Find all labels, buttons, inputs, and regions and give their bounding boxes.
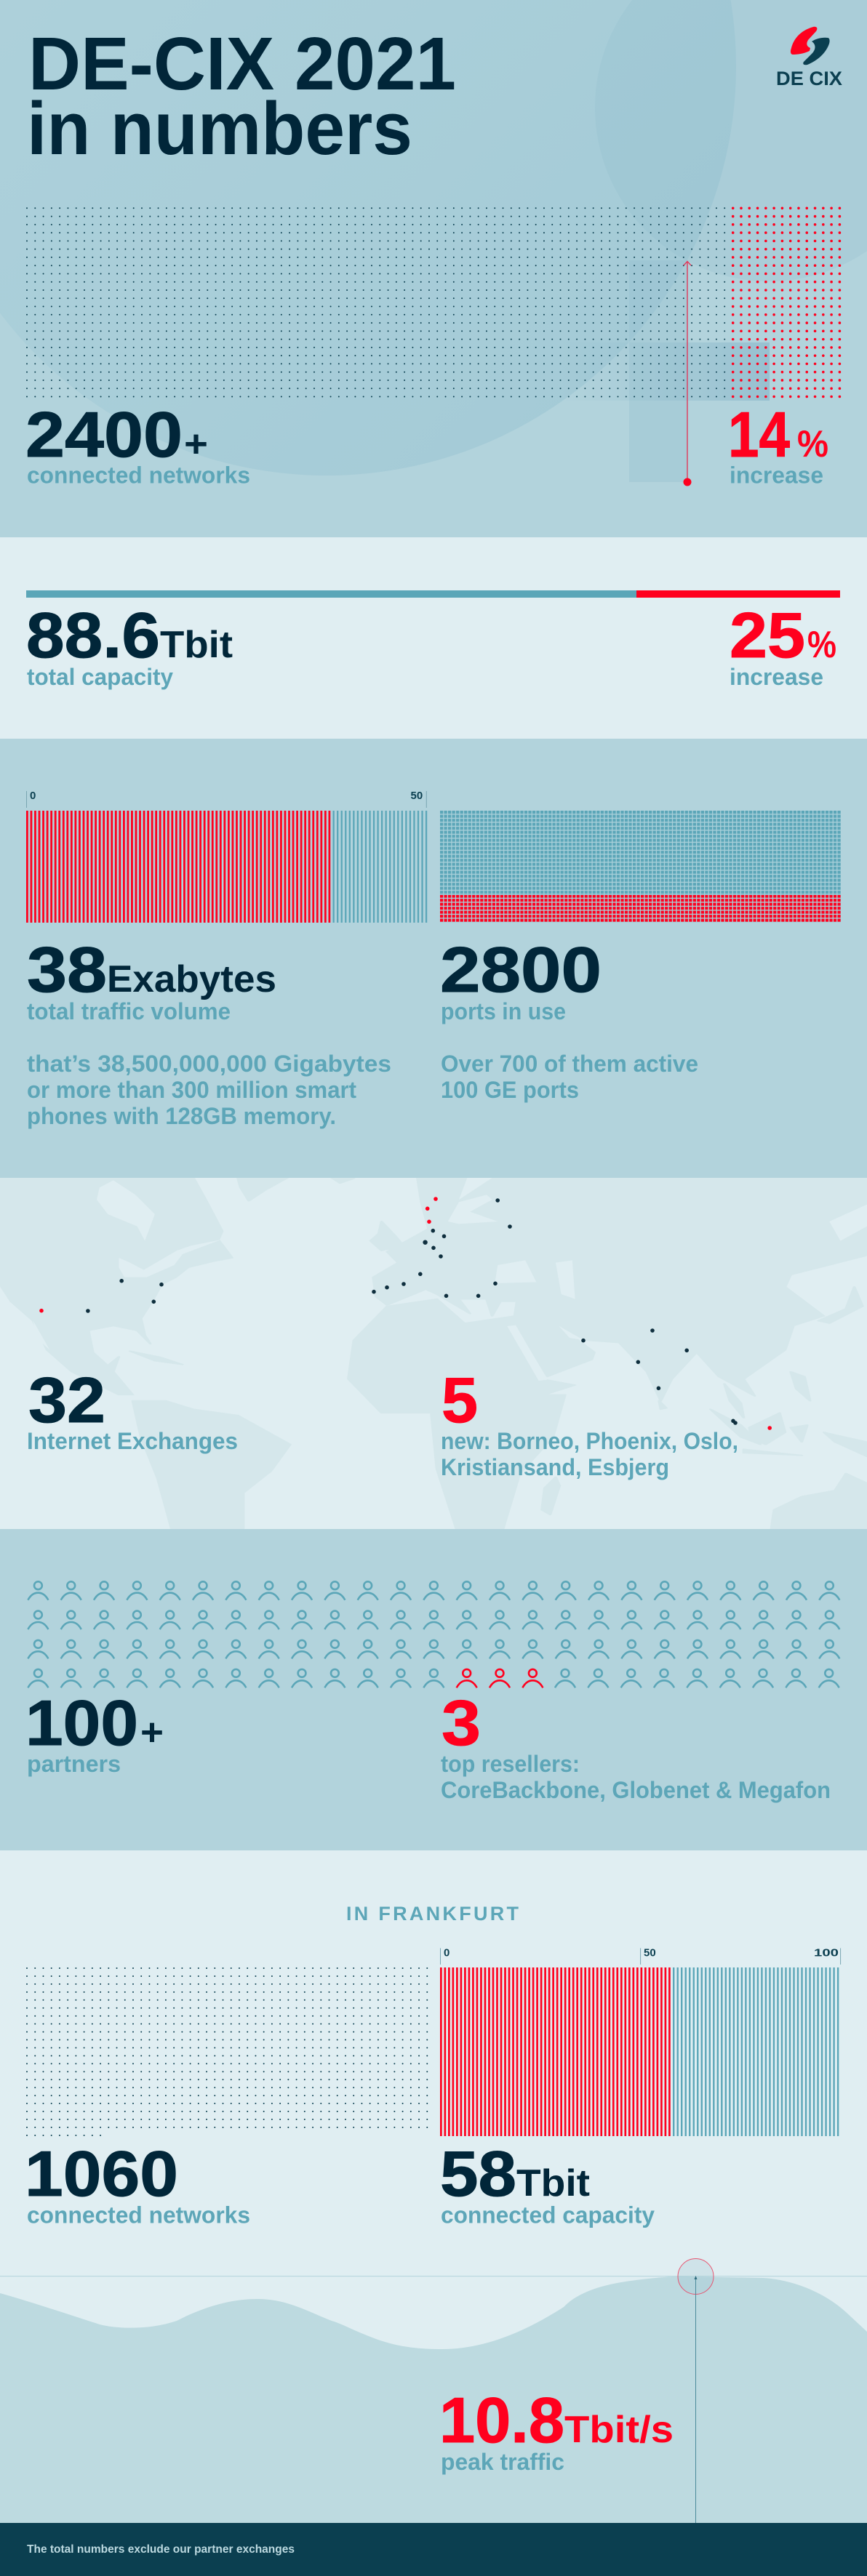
panel: partners — [0, 1529, 867, 1850]
area chart: peak traffic — [0, 2276, 867, 2523]
stat: 2400: 2400 — [25, 398, 183, 470]
label: top resellers: CoreBackbone, Globenet & Megafon — [441, 1777, 831, 1803]
arrow: increase marker — [684, 262, 691, 486]
unit: Exabytes: Exabytes — [107, 958, 276, 1000]
label: top resellers: top resellers: — [441, 1751, 580, 1777]
unit: Tbit/s: Tbit/s — [564, 2409, 674, 2451]
label: total capacity: total capacity — [27, 664, 173, 690]
stat: 3: 3 — [442, 1687, 481, 1759]
stat: 10.8: 10.8 — [439, 2384, 564, 2456]
label: new exchanges: Kristiansand, Esbjerg — [441, 1454, 669, 1480]
bar chart: connected capacity stripes — [440, 1967, 841, 2136]
label: new exchanges: new: Borneo, Phoenix, Oslo, — [441, 1428, 738, 1454]
unit: Tbit: Tbit — [160, 624, 233, 666]
stat: 100: 100 — [25, 1687, 138, 1759]
bar: capacity — [26, 590, 840, 598]
stat: 58: 58 — [440, 2138, 516, 2210]
label: connected networks: connected networks — [27, 462, 250, 489]
icon array: 100 partners, 3 red — [28, 1581, 839, 1688]
unit: Tbit: Tbit — [516, 2162, 590, 2204]
chart axis: 0 to 100: 100 — [814, 1947, 839, 1959]
stat: 88.6: 88.6 — [26, 599, 160, 671]
stat: percent: % — [807, 624, 836, 666]
title: in numbers — [27, 87, 412, 170]
stat: plus sign: + — [140, 1712, 164, 1754]
label: Internet Exchanges: Internet Exchanges — [27, 1428, 238, 1454]
world map — [0, 1178, 867, 1528]
panel: total capacity — [0, 537, 867, 739]
label: increase: increase — [730, 462, 823, 489]
stat: 2800: 2800 — [440, 934, 602, 1006]
waffle chart: 2800 ports, 700 red — [440, 811, 841, 923]
chart axis: 0 to 50 — [26, 790, 426, 808]
stat: 14: 14 — [728, 398, 790, 470]
stat: 1060: 1060 — [25, 2138, 178, 2210]
title — [27, 22, 456, 170]
text block: traffic explanation: that’s 38,500,000,000 Gigabytes — [27, 1051, 391, 1077]
chart axis: 0 to 50: 0 — [30, 790, 36, 802]
chart axis: 0 to 100: 0 — [444, 1947, 450, 1959]
panel: in Frankfurt — [0, 1850, 867, 2523]
stat: 5: 5 — [442, 1364, 478, 1436]
title: DE-CIX 2021 — [28, 22, 456, 105]
label: connected networks: connected networks — [27, 2202, 250, 2228]
chart axis: 0 to 100: 50 — [644, 1947, 656, 1959]
stat: plus sign: + — [184, 423, 208, 465]
dot grid: 1060 networks — [27, 1968, 428, 2135]
map markers: new exchanges — [39, 1197, 772, 1430]
callout: peak marker — [678, 2258, 714, 2523]
label: increase: increase — [730, 664, 823, 690]
text block: ports explanation: Over 700 of them active — [441, 1051, 698, 1077]
chart axis: 0 to 50: 50 — [410, 790, 423, 802]
text block: ports explanation: 100 GE ports — [441, 1077, 579, 1103]
label: partners: partners — [27, 1751, 121, 1777]
heading: in Frankfurt: IN FRANKFURT — [346, 1903, 519, 1925]
label: peak traffic: peak traffic — [441, 2449, 564, 2475]
panel: traffic volume and ports — [0, 739, 867, 1178]
stat: 38: 38 — [27, 934, 107, 1006]
text block: traffic explanation: phones with 128GB memory. — [27, 1103, 336, 1129]
footer — [0, 2523, 867, 2576]
text block: traffic explanation — [27, 1051, 391, 1129]
text block: traffic explanation: or more than 300 million smart — [27, 1077, 356, 1103]
label: ports in use: ports in use — [441, 998, 566, 1024]
stat: 25: 25 — [730, 599, 805, 671]
label: top resellers — [441, 1751, 831, 1803]
bar chart: traffic volume stripes — [26, 811, 428, 923]
map markers: existing exchanges — [86, 1198, 738, 1425]
icon: DE-CIX logo — [776, 27, 842, 89]
text block: ports explanation — [441, 1051, 698, 1103]
label: total traffic volume: total traffic volume — [27, 998, 231, 1024]
stat: percent: % — [797, 423, 828, 465]
label: new exchanges — [441, 1428, 738, 1480]
background shapes — [0, 0, 867, 482]
chart axis: 0 to 100 — [441, 1947, 841, 1965]
dot grid: 2400 networks, 14% red — [27, 208, 840, 397]
label: connected capacity: connected capacity — [441, 2202, 655, 2228]
footnote: The total numbers exclude our partner exchanges — [27, 2543, 295, 2556]
stat: 32: 32 — [28, 1364, 105, 1436]
panel: internet exchanges map — [0, 1178, 867, 1529]
panel: header and connected networks — [20, 0, 866, 486]
icon: DE-CIX logo: DE CIX — [776, 68, 842, 89]
